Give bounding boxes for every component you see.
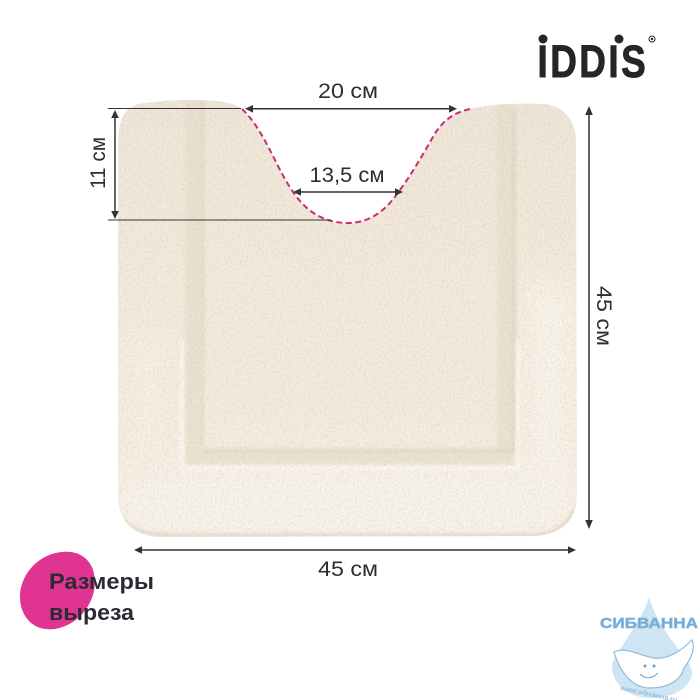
caption: cut-out dimensions: выреза (49, 600, 135, 625)
label: 20 cm: 20 см (318, 79, 378, 103)
dimension: cut-out height guide lines (108, 108, 331, 220)
dimension arrow: bottom 45 cm (134, 546, 576, 554)
caption: cut-out dimensions (49, 569, 154, 625)
dimension arrow: 20 cm (245, 105, 457, 113)
watermark: sibvanna logo (600, 597, 698, 700)
pink dashed cut-out outline (242, 109, 470, 223)
pink blob behind caption (20, 552, 95, 629)
caption: cut-out dimensions: Размеры (49, 569, 154, 594)
label: bottom 45 cm: 45 см (318, 557, 378, 581)
inner frame band (185, 100, 515, 465)
watermark: sibvanna logo: СИБВАННА (600, 615, 698, 632)
iddis logo: IDDIS (538, 37, 648, 87)
label: 11 cm: 11 см (86, 137, 110, 189)
dimension arrow: 13.5 cm (293, 188, 403, 196)
dimension arrow: right 45 cm (585, 106, 593, 529)
bath mat (118, 100, 578, 540)
dimension arrow: 11 cm (111, 110, 119, 219)
light ridge around the frame (182, 340, 518, 468)
label: 13.5 cm: 13,5 см (310, 163, 384, 187)
label: right 45 cm: 45 см (592, 286, 616, 346)
